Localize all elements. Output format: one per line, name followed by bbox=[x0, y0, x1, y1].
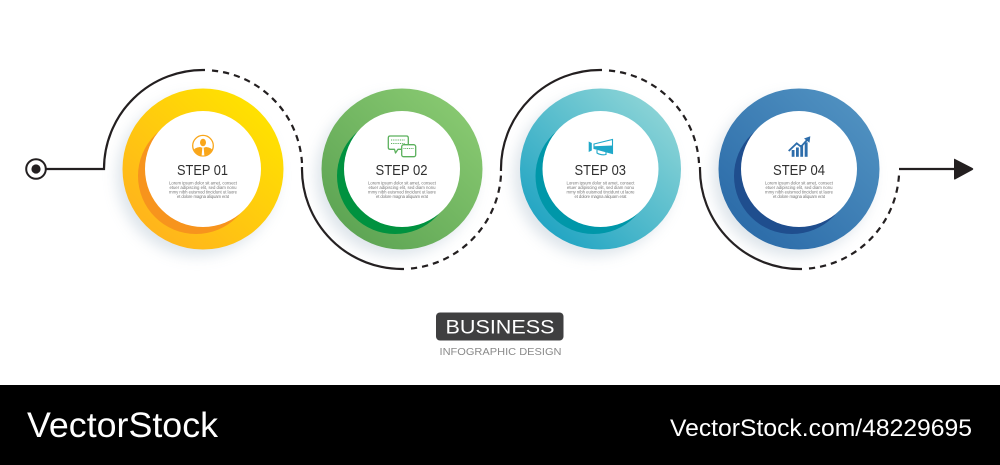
step 04 heading: STEP 04 bbox=[773, 163, 825, 179]
step 03 ring bbox=[514, 88, 681, 256]
step 02 body text: Lorem ipsum dolor sit amet, consect bbox=[368, 180, 437, 186]
step 04 bbox=[713, 88, 880, 256]
subtitle: INFOGRAPHIC DESIGN bbox=[440, 347, 562, 358]
timeline path bbox=[46, 70, 956, 269]
icon: businessman bbox=[193, 135, 213, 156]
footer logo: VectorStock bbox=[27, 406, 219, 445]
step 01 ring bbox=[117, 88, 284, 256]
step 02 ring bbox=[316, 88, 482, 256]
icon: growth chart bbox=[789, 136, 810, 157]
step 02 body text: mmy nibh euismod tincidunt ut laore bbox=[368, 190, 437, 195]
step 03 heading: STEP 03 bbox=[574, 163, 626, 179]
title badge: BUSINESS bbox=[446, 316, 554, 338]
step 03 body text: Lorem ipsum dolor sit amet, consect bbox=[566, 180, 635, 186]
icon: megaphone bbox=[589, 140, 612, 155]
footer band bbox=[0, 385, 1000, 465]
step 01 body text: etuer adipiscing elit, sed diam nonu bbox=[170, 185, 237, 190]
step 04 ring bbox=[713, 88, 880, 256]
arrowhead bbox=[954, 159, 973, 180]
step 03 body text: mmy nibh euismod tincidunt ut laore bbox=[566, 190, 635, 195]
footer url: VectorStock.com/48229695 bbox=[670, 415, 972, 442]
step 04 body text: etuer adipiscing elit, sed diam nonu bbox=[766, 185, 833, 190]
step 01 body text: mmy nibh euismod tincidunt ut laore bbox=[169, 190, 238, 195]
step 02 body text: etuer adipiscing elit, sed diam nonu bbox=[368, 185, 436, 190]
step 03 body text: etuer adipiscing elit, sed diam nonu bbox=[567, 185, 635, 190]
step 03 body text: et dolore magna aliquam erat bbox=[574, 194, 627, 199]
step 01 body text: Lorem ipsum dolor sit amet, consect bbox=[169, 180, 238, 186]
step 01 bbox=[117, 88, 284, 256]
step 04 body text: mmy nibh euismod tincidunt ut laore bbox=[765, 190, 834, 195]
step 04 body text: et dolore magna aliquam erat bbox=[773, 194, 826, 199]
step 02 bbox=[316, 88, 482, 256]
step 03 bbox=[514, 88, 681, 256]
step 04 body text: Lorem ipsum dolor sit amet, consect bbox=[765, 180, 834, 186]
step 01 heading: STEP 01 bbox=[177, 163, 228, 179]
icon: chat bubbles bbox=[388, 136, 416, 157]
start marker bbox=[26, 159, 46, 179]
title badge bbox=[436, 312, 564, 340]
step 02 body text: et dolore magna aliquam erat bbox=[376, 194, 429, 199]
step 01 body text: et dolore magna aliquam erat bbox=[177, 194, 230, 199]
step 02 heading: STEP 02 bbox=[376, 163, 428, 179]
